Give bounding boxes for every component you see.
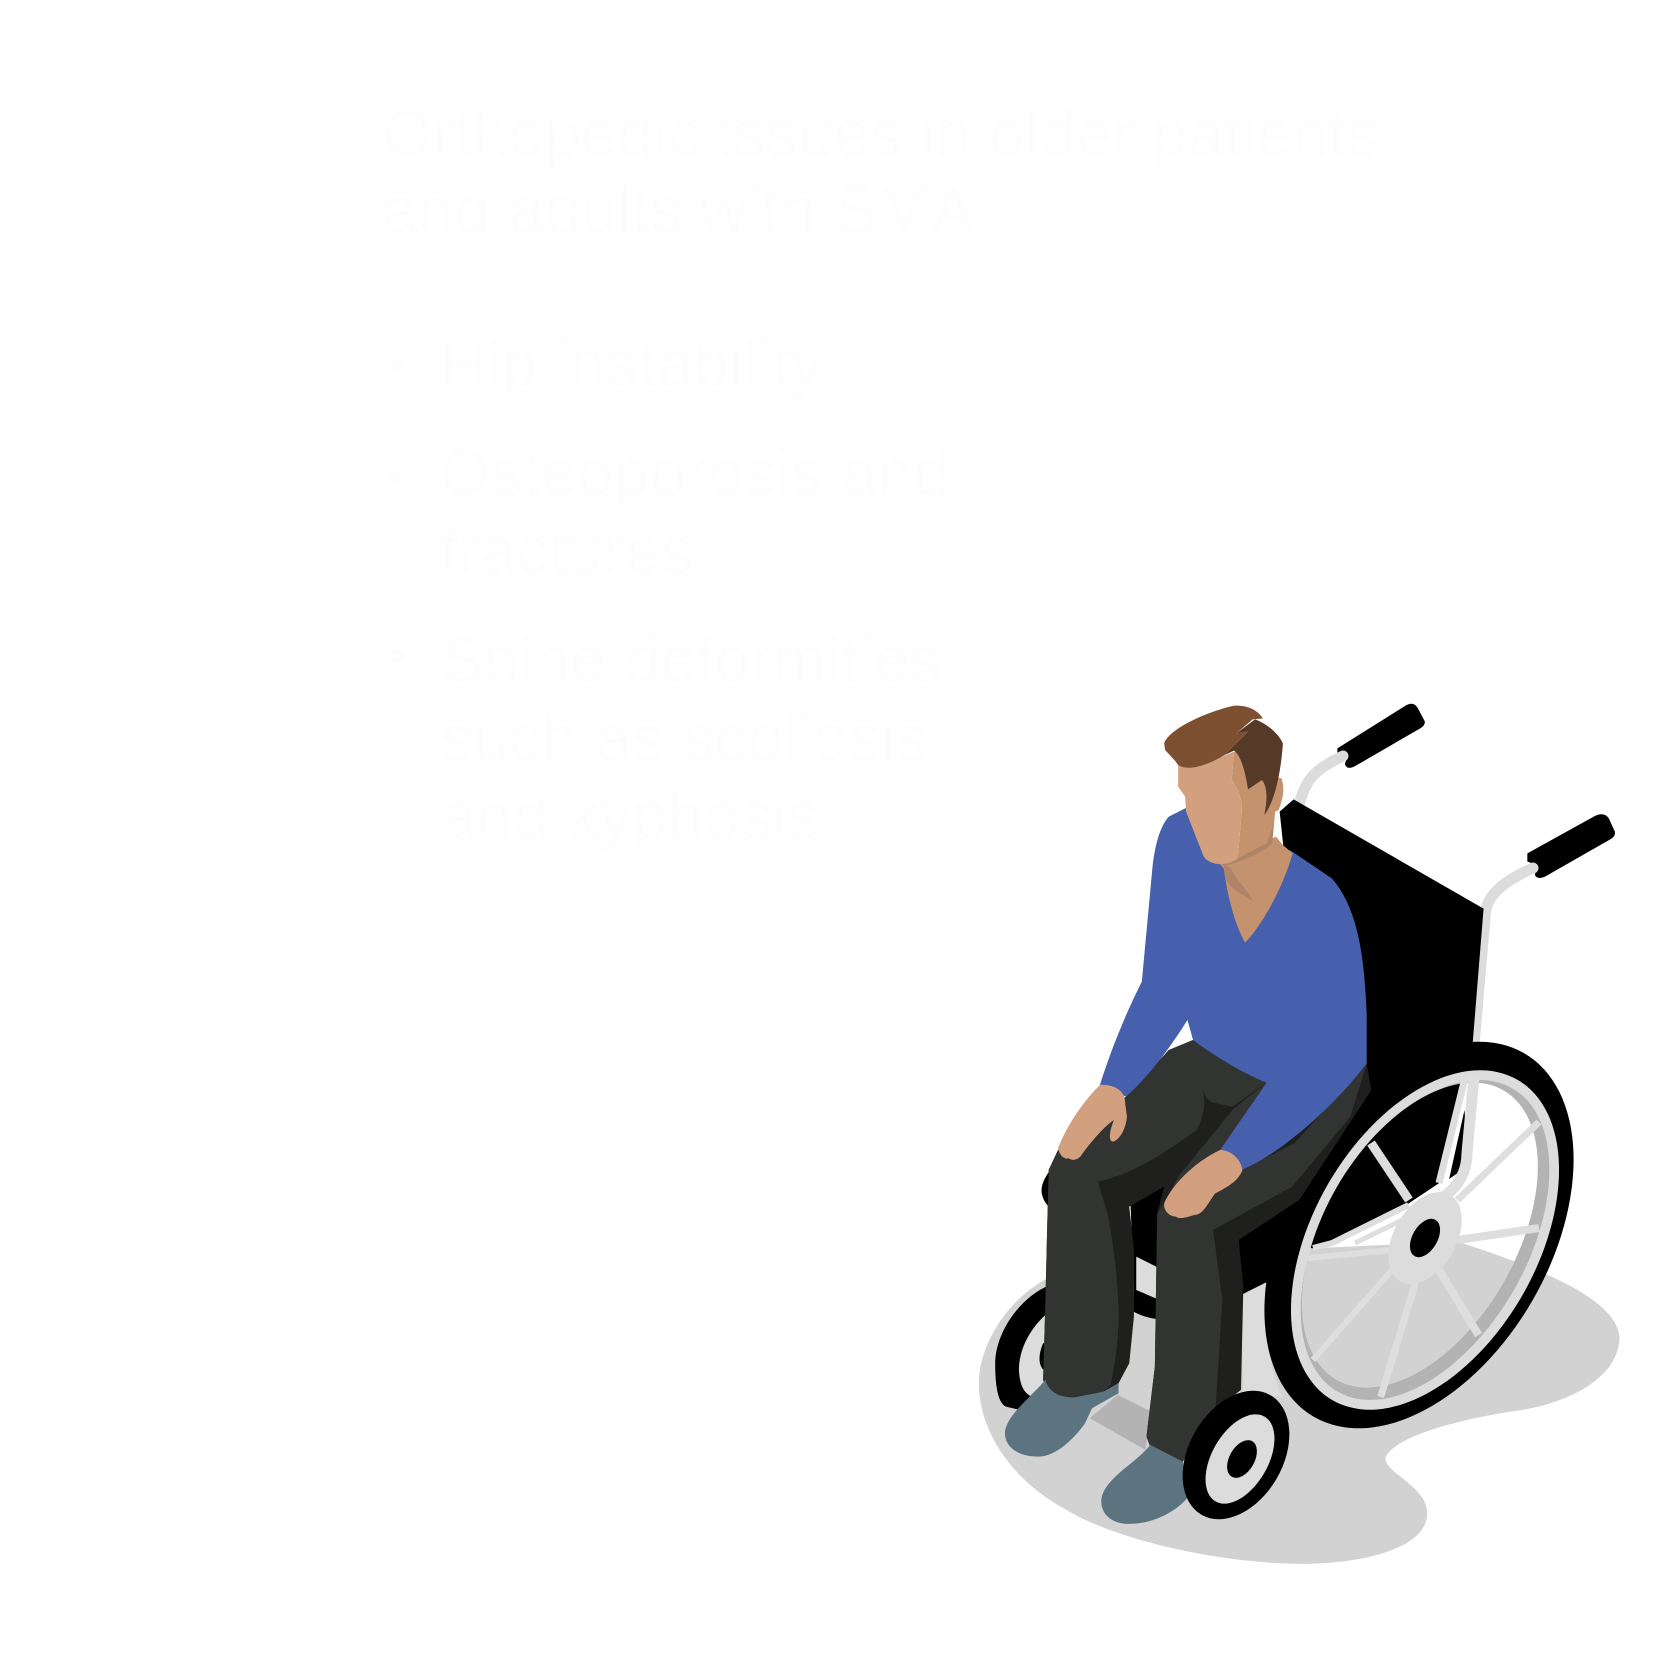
spokes and strut bbox=[1308, 1077, 1539, 1397]
bullet list: and kyphosis bbox=[440, 779, 819, 852]
left handle grip bbox=[1337, 704, 1425, 768]
right handle tube bbox=[1474, 868, 1533, 1045]
frame and footrest bbox=[1090, 1160, 1322, 1450]
hair light bbox=[1164, 706, 1263, 768]
right shoe bbox=[1101, 1445, 1188, 1524]
crease bbox=[1197, 1085, 1234, 1130]
large rear wheel bbox=[1264, 1042, 1574, 1428]
wheel interior bbox=[1302, 1084, 1514, 1388]
bullet list: Osteoporosis and bbox=[440, 436, 949, 509]
man bbox=[1005, 706, 1371, 1524]
near leg bbox=[1146, 1063, 1367, 1462]
ear bbox=[1271, 777, 1283, 813]
tire bbox=[1201, 988, 1637, 1482]
far leg bbox=[1043, 1040, 1267, 1398]
left handle tube bbox=[1299, 756, 1343, 805]
hub bbox=[1373, 1179, 1477, 1297]
neck bbox=[1218, 837, 1293, 943]
right handle grip bbox=[1527, 814, 1615, 878]
bullet list: fractures bbox=[440, 514, 693, 587]
rear left wheel bbox=[995, 1285, 1055, 1410]
right hand bbox=[1164, 1150, 1242, 1218]
title bbox=[382, 97, 1379, 246]
front caster wheel bbox=[1161, 1372, 1311, 1538]
rim bbox=[1236, 1024, 1614, 1456]
seat back bbox=[1136, 799, 1484, 1253]
bullet list: such as scoliosis bbox=[440, 701, 928, 774]
bullet list bbox=[388, 327, 949, 852]
floor shadow bbox=[979, 1242, 1620, 1564]
title: and adults with SMA bbox=[382, 173, 975, 246]
face shaded side bbox=[1232, 752, 1278, 858]
jaw shadow bbox=[1220, 823, 1274, 866]
knee shadow bbox=[1042, 1170, 1071, 1207]
illustration: person in wheelchair bbox=[979, 704, 1637, 1564]
bullet list: Spine deformities bbox=[440, 623, 942, 696]
left shoe bbox=[1005, 1380, 1119, 1457]
neck shadow bbox=[1224, 865, 1253, 901]
bullet list: Hip instability bbox=[440, 327, 823, 400]
sweater bbox=[1100, 807, 1367, 1170]
wheelchair bbox=[995, 704, 1637, 1482]
title: Orthopedic issues in older patients bbox=[382, 97, 1379, 170]
trousers shade bbox=[1043, 1040, 1371, 1462]
face bbox=[1178, 752, 1242, 864]
hair dark bbox=[1225, 719, 1283, 815]
left hand bbox=[1058, 1085, 1127, 1160]
